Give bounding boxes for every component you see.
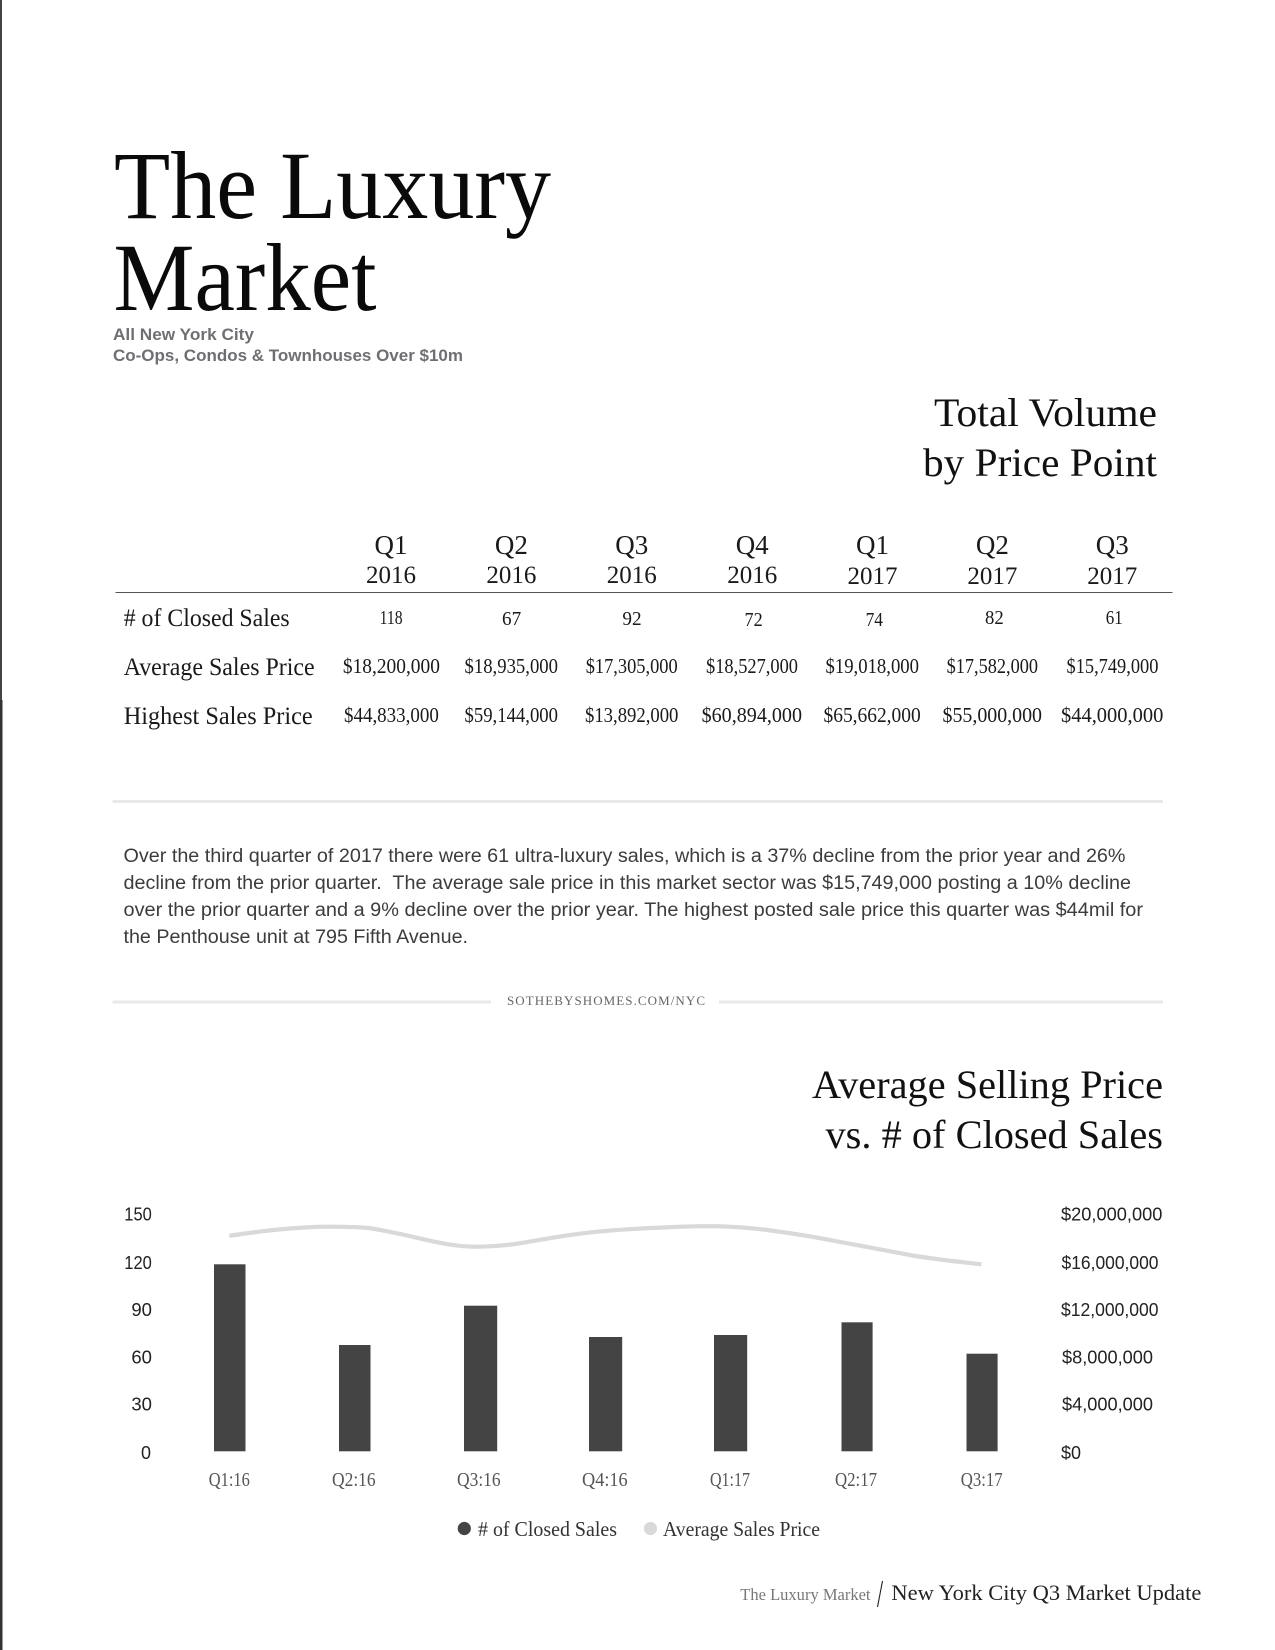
table column headers: [366, 530, 1137, 590]
table column headers: 2016: [366, 562, 416, 589]
left axis labels: 120: [124, 1253, 152, 1273]
x axis labels: Q4:16: [582, 1469, 628, 1491]
table row: closed sales: 118: [380, 607, 403, 629]
table: quarterly sales data: [116, 530, 1172, 730]
table row: closed sales: 61: [1106, 607, 1123, 629]
subtitle: Co-Ops, Condos & Townhouses Over $10m: [113, 346, 463, 365]
x axis labels: Q3:16: [457, 1469, 501, 1491]
footer: [740, 1580, 1201, 1607]
table column headers: Q2: [976, 530, 1009, 560]
x axis labels: Q2:16: [332, 1469, 376, 1491]
table column headers: Q3: [1096, 530, 1129, 560]
table row: highest sales price: $60,894,000: [702, 703, 802, 727]
right axis labels: $8,000,000: [1062, 1348, 1153, 1368]
table column headers: 2016: [727, 562, 777, 589]
table column headers: 2017: [967, 563, 1017, 590]
right axis labels: $20,000,000: [1061, 1204, 1162, 1224]
right axis labels: $12,000,000: [1061, 1300, 1158, 1320]
x axis labels: Q3:17: [961, 1469, 1003, 1491]
table row: closed sales: 82: [985, 607, 1004, 629]
table row: average sales price: [124, 654, 1158, 681]
heading: total volume by price point: [923, 390, 1157, 485]
table row: closed sales: 92: [622, 608, 642, 630]
subtitle: [113, 325, 463, 365]
table row: average sales price: $19,018,000: [826, 654, 919, 678]
footer: The Luxury Market: [740, 1585, 871, 1604]
right axis labels: $0: [1061, 1443, 1081, 1463]
table row: closed sales: [124, 605, 1123, 632]
left axis labels: 0: [141, 1443, 151, 1463]
table row: highest sales price: $44,000,000: [1061, 703, 1163, 727]
table row: closed sales: 67: [502, 608, 521, 630]
table row: average sales price: $17,305,000: [586, 654, 678, 678]
table row: average sales price: $17,582,000: [947, 654, 1038, 678]
table row: highest sales price: [124, 703, 1163, 730]
left axis labels: 60: [131, 1348, 152, 1368]
table column headers: 2016: [486, 562, 536, 589]
table column headers: Q1: [856, 530, 889, 560]
table row: average sales price: $15,749,000: [1066, 654, 1158, 678]
table row: highest sales price: $55,000,000: [942, 703, 1042, 727]
table column headers: Q1: [374, 530, 408, 560]
table row: average sales price: $18,200,000: [343, 654, 440, 678]
table column headers: 2017: [848, 563, 898, 590]
website divider label: SOTHEBYSHOMES.COM/NYC: [507, 993, 705, 1008]
bars: closed sales: [214, 1264, 998, 1451]
legend: [458, 1517, 820, 1541]
table column headers: Q2: [495, 530, 528, 560]
body paragraph: Over the third quarter of 2017 there were 61 ultra-luxury sales, which is a 37% decline from the prior year and 26%: [124, 846, 1126, 867]
x axis labels: Q2:17: [835, 1469, 877, 1491]
body paragraph: over the prior quarter and a 9% decline over the prior year. The highest posted sale price this quarter was $44mil for: [124, 900, 1144, 921]
right axis labels: $16,000,000: [1062, 1253, 1158, 1273]
table row: highest sales price: $13,892,000: [585, 703, 678, 727]
heading: average selling price vs closed sales: Average Selling Price: [812, 1062, 1163, 1107]
left axis labels: 150: [124, 1204, 152, 1224]
x axis labels: Q1:16: [209, 1469, 250, 1491]
heading: average selling price vs closed sales: vs. # of Closed Sales: [826, 1112, 1163, 1157]
table column headers: 2017: [1087, 563, 1137, 590]
left axis labels: [124, 1204, 152, 1463]
table row: highest sales price: $59,144,000: [464, 703, 558, 727]
table column headers: Q3: [615, 530, 648, 560]
table row: highest sales price: $44,833,000: [344, 703, 439, 727]
legend: # of Closed Sales: [478, 1517, 617, 1541]
body paragraph: decline from the prior quarter. The average sale price in this market sector was $15,749,000 posting a 10% decline: [124, 873, 1131, 894]
table row: highest sales price: Highest Sales Price: [124, 703, 313, 730]
title: The Luxury: [114, 132, 551, 239]
title: Market: [114, 224, 377, 331]
table row: average sales price: $18,935,000: [464, 654, 558, 678]
right axis labels: [1061, 1204, 1162, 1463]
right axis labels: $4,000,000: [1062, 1394, 1153, 1414]
table row: average sales price: $18,527,000: [706, 654, 798, 678]
table row: closed sales: # of Closed Sales: [124, 605, 290, 632]
table row: closed sales: 74: [866, 609, 883, 631]
x axis labels: Q1:17: [710, 1469, 750, 1491]
title: [114, 132, 551, 331]
legend: Average Sales Price: [663, 1517, 820, 1541]
left axis labels: 30: [131, 1394, 152, 1414]
left axis labels: 90: [131, 1300, 152, 1320]
heading: total volume by price point: Total Volume: [934, 390, 1157, 435]
footer: New York City Q3 Market Update: [891, 1580, 1201, 1605]
combo chart: average selling price vs closed sales: [124, 1204, 1162, 1541]
heading: total volume by price point: by Price Point: [923, 440, 1157, 485]
table row: highest sales price: $65,662,000: [824, 703, 921, 727]
body paragraph: the Penthouse unit at 795 Fifth Avenue.: [124, 927, 468, 948]
table row: closed sales: 72: [744, 609, 763, 631]
table column headers: Q4: [736, 530, 769, 560]
table column headers: 2016: [607, 562, 657, 589]
line: average sales price: [229, 1226, 981, 1264]
heading: average selling price vs closed sales: [812, 1062, 1163, 1157]
table row: average sales price: Average Sales Price: [124, 654, 315, 681]
body paragraph: [124, 846, 1144, 948]
subtitle: All New York City: [113, 325, 255, 344]
x axis labels: [209, 1469, 1003, 1491]
